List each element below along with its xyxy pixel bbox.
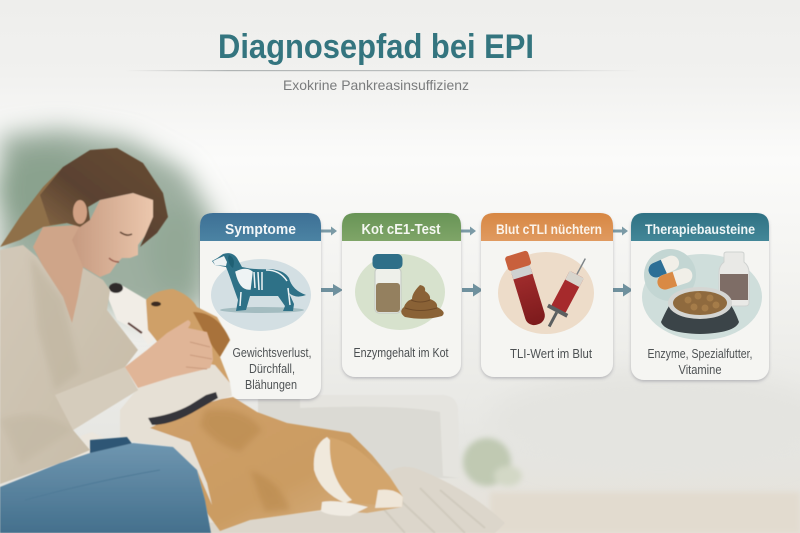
sweater cuff — [55, 367, 138, 430]
dog front paws — [57, 432, 104, 472]
bottle — [719, 252, 749, 306]
panel: Blut cTLI nüchtern — [481, 213, 613, 377]
ear — [73, 200, 87, 224]
header: Kot cE1-Test — [342, 213, 461, 241]
dog ear — [193, 312, 230, 357]
heading: Blut cTLI nüchtern: Blut cTLI nüchtern — [496, 222, 602, 237]
ponytail — [0, 167, 80, 247]
subtitle: Exokrine Pankreasinsuffizienz — [283, 77, 469, 93]
arrow: middle 1 — [321, 284, 343, 296]
header: Symptome — [200, 213, 321, 241]
blanket — [100, 467, 505, 533]
heading: Symptome: Symptome — [225, 222, 296, 238]
collar — [148, 392, 218, 425]
dog head — [146, 289, 230, 383]
dog nose — [109, 283, 123, 293]
face — [72, 193, 155, 277]
capsule blue — [646, 253, 681, 280]
blurred trees — [0, 128, 215, 320]
dog rear paw — [321, 501, 368, 516]
sofa — [258, 395, 459, 480]
sweater — [0, 245, 138, 484]
dog haunch — [313, 437, 403, 507]
header: Blut cTLI nüchtern — [481, 213, 613, 241]
arrow: middle 2 — [462, 284, 483, 296]
arrow: middle 3 — [613, 284, 633, 296]
text: therapy components — [648, 347, 752, 377]
bowl — [661, 302, 739, 334]
title rule — [125, 70, 640, 71]
header: Therapiebausteine — [631, 213, 769, 241]
dog — [57, 283, 403, 531]
icon: dog skeleton — [211, 253, 311, 331]
sweater sleeve shading — [30, 255, 80, 390]
icon: sample jar and stool — [355, 254, 445, 330]
icon: blood tube and syringe — [498, 250, 595, 334]
arrow: top 2 — [461, 226, 476, 236]
text: therapy components: Enzyme, Spezialfutter, — [648, 347, 752, 361]
title: Diagnosepfad bei EPI — [218, 28, 534, 66]
closed eye — [120, 232, 132, 235]
dark hem — [90, 437, 133, 455]
panel: Kot cE1-Test — [342, 213, 461, 377]
heading: Therapiebausteine: Therapiebausteine — [645, 221, 755, 237]
text: symptoms — [232, 346, 312, 392]
dog eye — [151, 302, 161, 306]
text: symptoms: Gewichtsverlust, — [232, 346, 312, 360]
dog mouth — [128, 323, 142, 333]
text: symptoms: Blähungen — [245, 378, 297, 392]
text: TLI value: TLI-Wert im Blut — [510, 347, 592, 361]
dog body darker patches — [200, 409, 385, 512]
blurred shrub — [463, 438, 522, 486]
text: symptoms: Dürchfall, — [249, 362, 295, 376]
arrow: top 1 — [321, 226, 337, 236]
panel: Therapiebausteine — [631, 213, 769, 380]
dog muzzle — [108, 283, 160, 345]
hand — [125, 320, 213, 388]
woman — [0, 148, 213, 533]
icon: capsules, bottle and food bowl — [642, 249, 762, 340]
arrow: top 3 — [613, 226, 628, 236]
mouth — [109, 258, 119, 262]
text: therapy components: Vitamine — [678, 363, 722, 377]
jeans — [0, 443, 211, 533]
panel: Symptome — [200, 213, 321, 399]
dog body — [140, 397, 403, 531]
dog chest fur — [120, 360, 232, 505]
hair — [40, 148, 168, 247]
neck and chest — [33, 225, 84, 325]
heading: Kot cE1-Test: Kot cE1-Test — [362, 222, 441, 238]
text: enzyme content: Enzymgehalt im Kot — [354, 346, 449, 360]
capsule orange — [655, 266, 694, 292]
